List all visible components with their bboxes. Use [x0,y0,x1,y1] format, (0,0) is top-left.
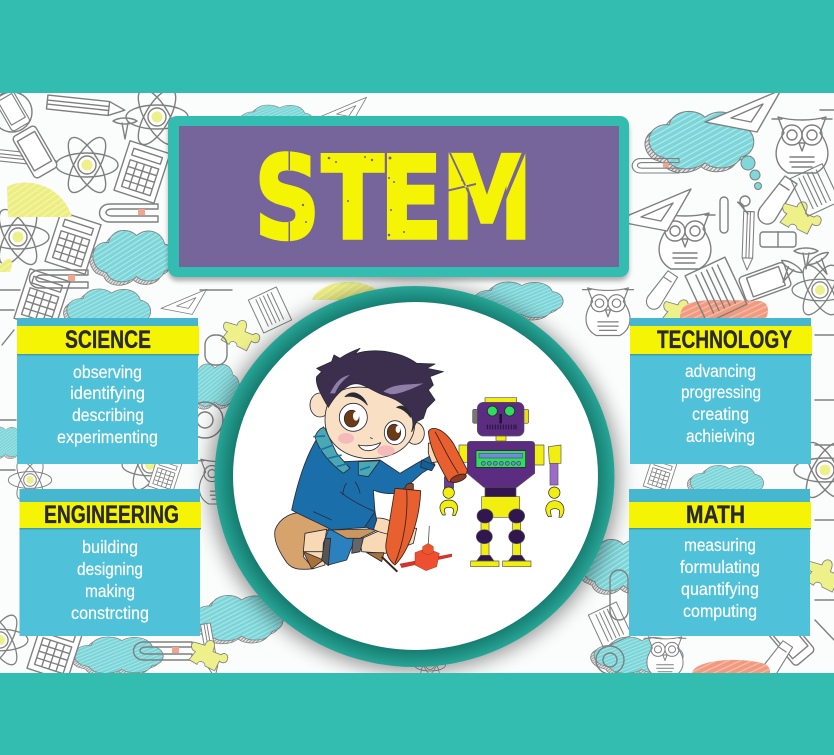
robot [440,398,564,567]
title plaque [168,116,629,281]
stencil distress [288,150,526,242]
top teal band [0,0,834,93]
plaque fill [179,126,619,267]
technology list: advancing [685,361,756,381]
central circle badge [214,286,614,667]
math heading: MATH [686,501,745,529]
engineering list: making [85,581,135,601]
science list: describing [72,405,144,425]
technology list: creating [692,404,749,424]
doodle background [0,84,834,681]
white disc [233,302,598,650]
engineering list: designing [77,559,143,579]
technology heading: TECHNOLOGY [657,326,792,354]
science heading [17,326,199,356]
doodle: school supplies pattern [0,84,834,681]
science list: experimenting [57,427,158,447]
circle shadow [210,287,618,671]
held rocket [428,428,467,484]
technology list: progressing [681,382,761,402]
science heading: SCIENCE [65,326,151,354]
engineering heading: ENGINEERING [44,501,179,529]
math list: measuring [684,535,756,555]
panel: engineering [20,489,201,636]
boy [275,348,443,569]
title: STEM [254,133,532,266]
engineering list: constrcting [71,603,149,623]
engineering list: building [82,537,138,557]
illustration: boy with robot [275,348,564,572]
math list: formulating [680,557,760,577]
technology list: achieiving [686,426,755,446]
technology list [681,361,761,446]
math heading [629,501,811,530]
bottom teal band [0,673,834,755]
math list: computing [683,601,757,621]
panel: technology [630,318,812,464]
science list [57,362,158,447]
engineering list [71,537,149,623]
panel: science [17,318,199,464]
toy block [400,526,452,571]
math list [680,535,760,621]
plaque border [168,116,629,277]
science list: identifying [70,383,145,403]
math list: quantifying [681,579,759,599]
science list: observing [73,362,142,382]
bottom rocket [382,483,421,572]
panel: math [629,489,811,636]
teal ring [214,286,614,667]
